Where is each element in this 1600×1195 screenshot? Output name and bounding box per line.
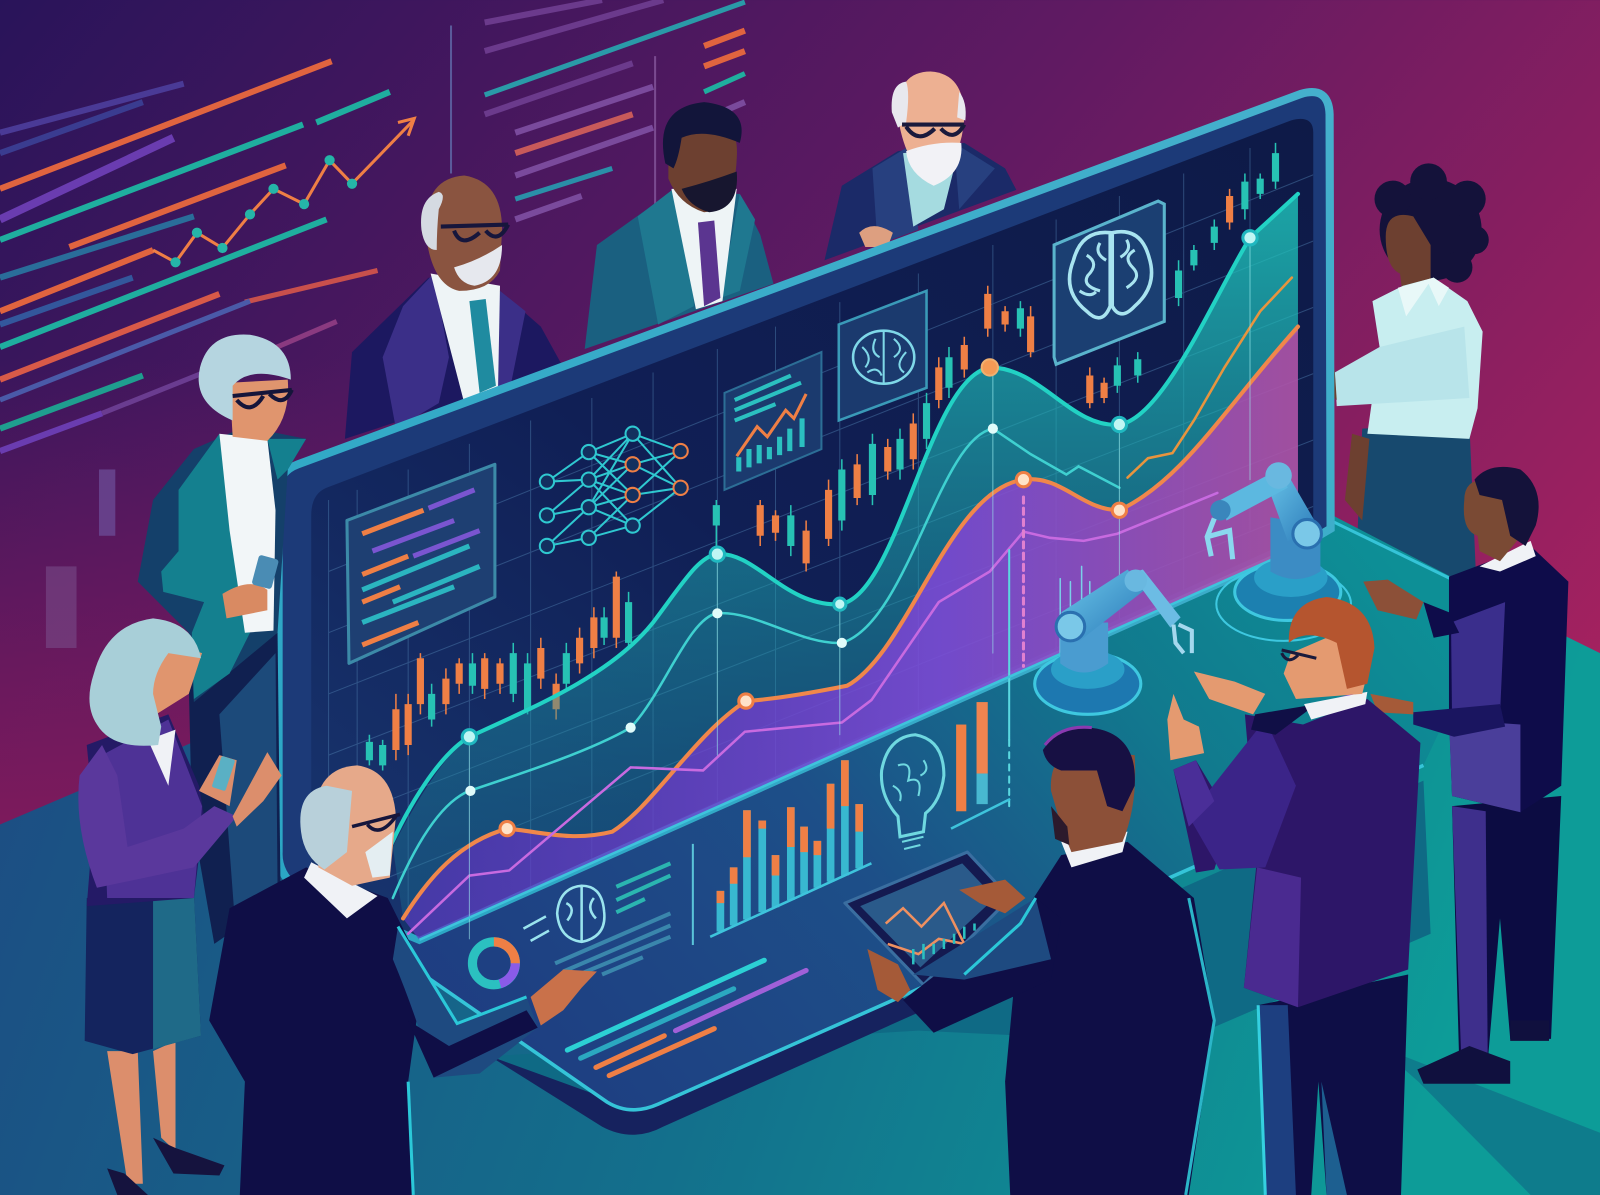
screen grid [329, 148, 1316, 980]
chart points [462, 231, 1257, 836]
small trend panel [724, 352, 821, 490]
person: woman with gray bob teal jacket [138, 335, 306, 944]
person: man with ginger hair back view [1167, 597, 1420, 1195]
small brain and text lines [523, 863, 670, 978]
person: old man with purple suit [345, 176, 563, 439]
floor [0, 521, 1600, 1195]
chart area fill teal [393, 194, 1298, 918]
person: man at right in purple suit [1363, 467, 1568, 1084]
wall data lines left [0, 61, 390, 451]
band divider line [419, 548, 1298, 940]
chart lines [388, 194, 1298, 939]
side bars [951, 702, 1010, 829]
table underside [490, 781, 1431, 1134]
table edge shadow [490, 995, 923, 1135]
table outline [284, 765, 1423, 1110]
table back edge [1333, 521, 1473, 590]
tablet [845, 852, 1010, 985]
lightbulb icon [881, 735, 944, 849]
person: man in dark suit with tablet [867, 727, 1214, 1195]
screen inner [311, 119, 1313, 937]
wall trend arrow [153, 118, 414, 267]
robot arm rear [1207, 462, 1351, 641]
brain panel small [839, 291, 927, 420]
wall data blocks [46, 469, 115, 648]
floor shadow right [1378, 1046, 1600, 1195]
brain panel large [1054, 201, 1164, 364]
donut chart [472, 942, 515, 985]
candlestick clusters [369, 143, 1276, 770]
person: woman with silver hair purple jacket [78, 618, 282, 1195]
person: old man with white beard navy suit [824, 71, 1016, 260]
table data lines [567, 960, 806, 1076]
neural network icon [540, 427, 688, 553]
robot arm front [1035, 569, 1192, 714]
person: woman with afro pointing [1273, 163, 1489, 612]
screen frame [279, 92, 1331, 940]
chart area fill purple [403, 327, 1298, 940]
table surface [284, 515, 1500, 1110]
person: bald man with white beard [209, 765, 597, 1195]
bar chart [693, 760, 871, 945]
screen with frame [279, 92, 1331, 940]
code panel [347, 464, 495, 663]
wall data lines right [451, 0, 745, 265]
person: man with beard teal suit [585, 102, 773, 349]
wall glow [0, 357, 714, 847]
